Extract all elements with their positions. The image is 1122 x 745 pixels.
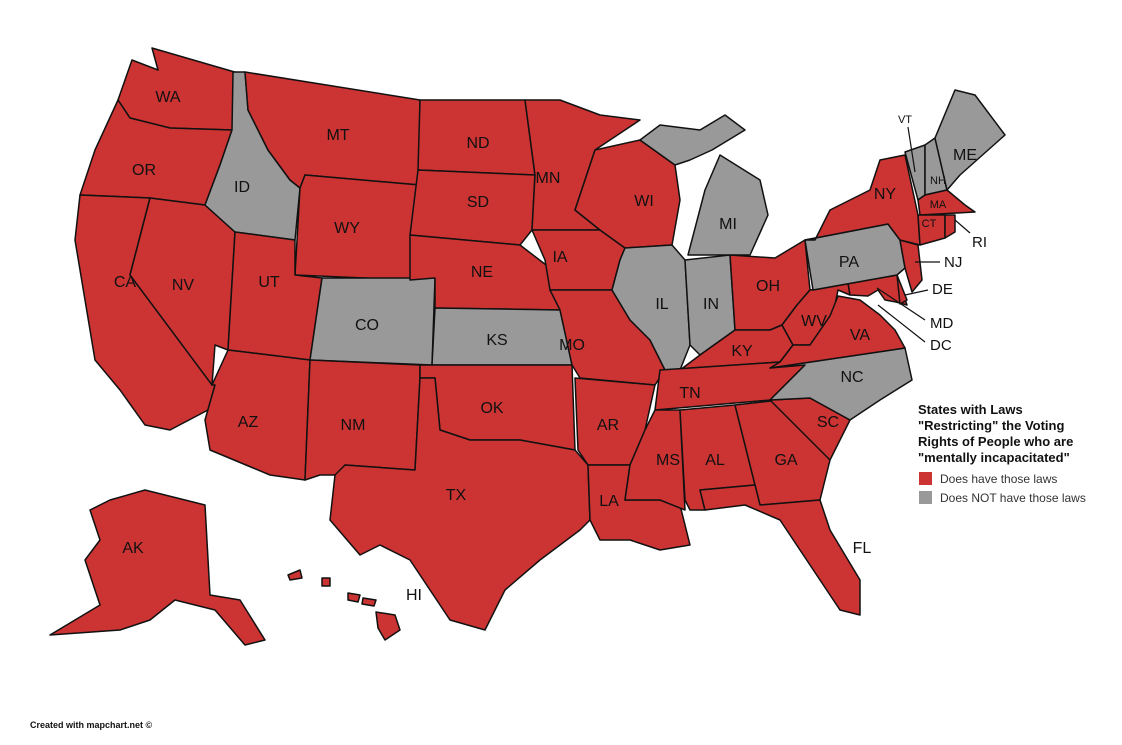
state labels: MO — [559, 337, 585, 354]
state ME — [935, 90, 1005, 190]
state labels: AR — [597, 417, 619, 434]
state TX — [330, 378, 590, 630]
state labels: IN — [703, 296, 719, 313]
leader labels: DC — [930, 337, 952, 354]
state MI upper — [640, 115, 745, 165]
state ND — [418, 100, 535, 175]
small state labels: MA — [930, 199, 947, 211]
state labels: KY — [731, 343, 753, 360]
state labels: NC — [840, 369, 864, 386]
state MN — [525, 100, 640, 230]
state labels: OH — [756, 278, 780, 295]
state labels: MI — [719, 216, 737, 233]
state OK — [420, 365, 575, 450]
state KY — [665, 325, 793, 370]
state VA — [770, 296, 905, 368]
legend: Does have those laws — [940, 472, 1057, 486]
state NV — [130, 198, 235, 385]
state labels: MN — [536, 170, 560, 187]
footer credit: Created with mapchart.net © — [30, 720, 153, 730]
state MS — [625, 410, 685, 510]
state HI — [288, 570, 400, 640]
state labels: CO — [355, 317, 379, 334]
state labels: NM — [341, 417, 365, 434]
state OR — [80, 100, 232, 205]
small state labels: CT — [922, 218, 937, 230]
state NC — [770, 348, 912, 420]
state WV — [782, 283, 850, 345]
state RI — [945, 215, 955, 238]
state labels: NE — [471, 264, 493, 281]
state labels: WA — [155, 89, 181, 106]
state AK — [50, 490, 265, 645]
state NM — [305, 360, 420, 480]
state SC — [770, 398, 850, 460]
leader lines — [877, 127, 970, 342]
state labels: ID — [234, 179, 250, 196]
state TN — [655, 362, 805, 410]
leader labels: DE — [932, 281, 953, 298]
leader labels: NJ — [944, 254, 962, 271]
legend item: no laws — [919, 491, 932, 504]
state AZ — [205, 350, 310, 480]
legend title: "Restricting" the Voting — [918, 418, 1064, 433]
state VT — [905, 145, 925, 200]
state LA — [588, 465, 690, 550]
state labels: HI — [406, 587, 422, 604]
state IL — [612, 245, 690, 370]
small state labels — [898, 114, 947, 230]
state NE — [410, 235, 560, 310]
state CT — [918, 215, 945, 245]
state labels: NY — [874, 186, 896, 203]
state labels: AK — [122, 540, 144, 557]
legend item: has laws — [919, 472, 932, 485]
state labels: SD — [467, 194, 489, 211]
state labels: IA — [552, 249, 568, 266]
state labels: WV — [801, 313, 827, 330]
state WA — [118, 48, 245, 130]
state labels: SC — [817, 414, 839, 431]
legend: Does NOT have those laws — [940, 491, 1086, 505]
state labels: CA — [114, 274, 136, 291]
state IN — [685, 255, 735, 355]
state MA — [918, 190, 975, 215]
state NJ — [900, 240, 922, 292]
state NH — [925, 138, 947, 195]
state labels: LA — [599, 493, 619, 510]
small state labels: VT — [898, 114, 912, 126]
state labels: AL — [705, 452, 725, 469]
state labels: IL — [655, 296, 669, 313]
state labels: OK — [480, 400, 504, 417]
state MI lower — [688, 155, 768, 255]
legend title: Rights of People who are — [918, 434, 1073, 449]
legend — [918, 402, 1086, 505]
state CA — [75, 195, 215, 430]
state MT — [245, 72, 420, 188]
state labels: GA — [774, 452, 798, 469]
state labels: PA — [839, 254, 859, 271]
state SD — [410, 170, 535, 245]
state labels: TN — [679, 385, 701, 402]
state MD — [813, 275, 907, 305]
state FL — [700, 485, 860, 615]
state OH — [730, 240, 810, 330]
state MO — [550, 290, 665, 385]
state ID — [205, 72, 300, 240]
state labels: AZ — [238, 414, 258, 431]
state labels: WY — [334, 220, 360, 237]
state AR — [575, 378, 655, 465]
state KS — [432, 308, 572, 365]
state labels — [114, 89, 977, 604]
map: states — [50, 48, 1005, 645]
state PA — [805, 224, 905, 290]
leader labels: MD — [930, 315, 953, 332]
legend title: "mentally incapacitated" — [918, 450, 1070, 465]
leader labels: RI — [972, 234, 987, 251]
state labels: NV — [172, 277, 194, 294]
state labels: WI — [634, 193, 654, 210]
state labels: ME — [953, 147, 977, 164]
state CO — [310, 278, 435, 365]
state WY — [295, 175, 420, 280]
state labels: MT — [326, 127, 350, 144]
leader labels — [930, 234, 987, 354]
state labels: OR — [132, 162, 156, 179]
state NY — [805, 155, 920, 245]
state DE — [897, 275, 907, 304]
state labels: VA — [850, 327, 870, 344]
state GA — [735, 400, 830, 505]
state labels: KS — [486, 332, 508, 349]
state labels: MS — [656, 452, 680, 469]
state WI — [575, 140, 680, 248]
state UT — [228, 232, 322, 360]
state AL — [680, 405, 755, 510]
legend title: States with Laws — [918, 402, 1023, 417]
state labels: FL — [853, 540, 871, 557]
state labels: TX — [446, 487, 467, 504]
state labels: ND — [466, 135, 490, 152]
state IA — [532, 230, 625, 290]
state labels: UT — [258, 274, 280, 291]
small state labels: NH — [930, 175, 946, 187]
